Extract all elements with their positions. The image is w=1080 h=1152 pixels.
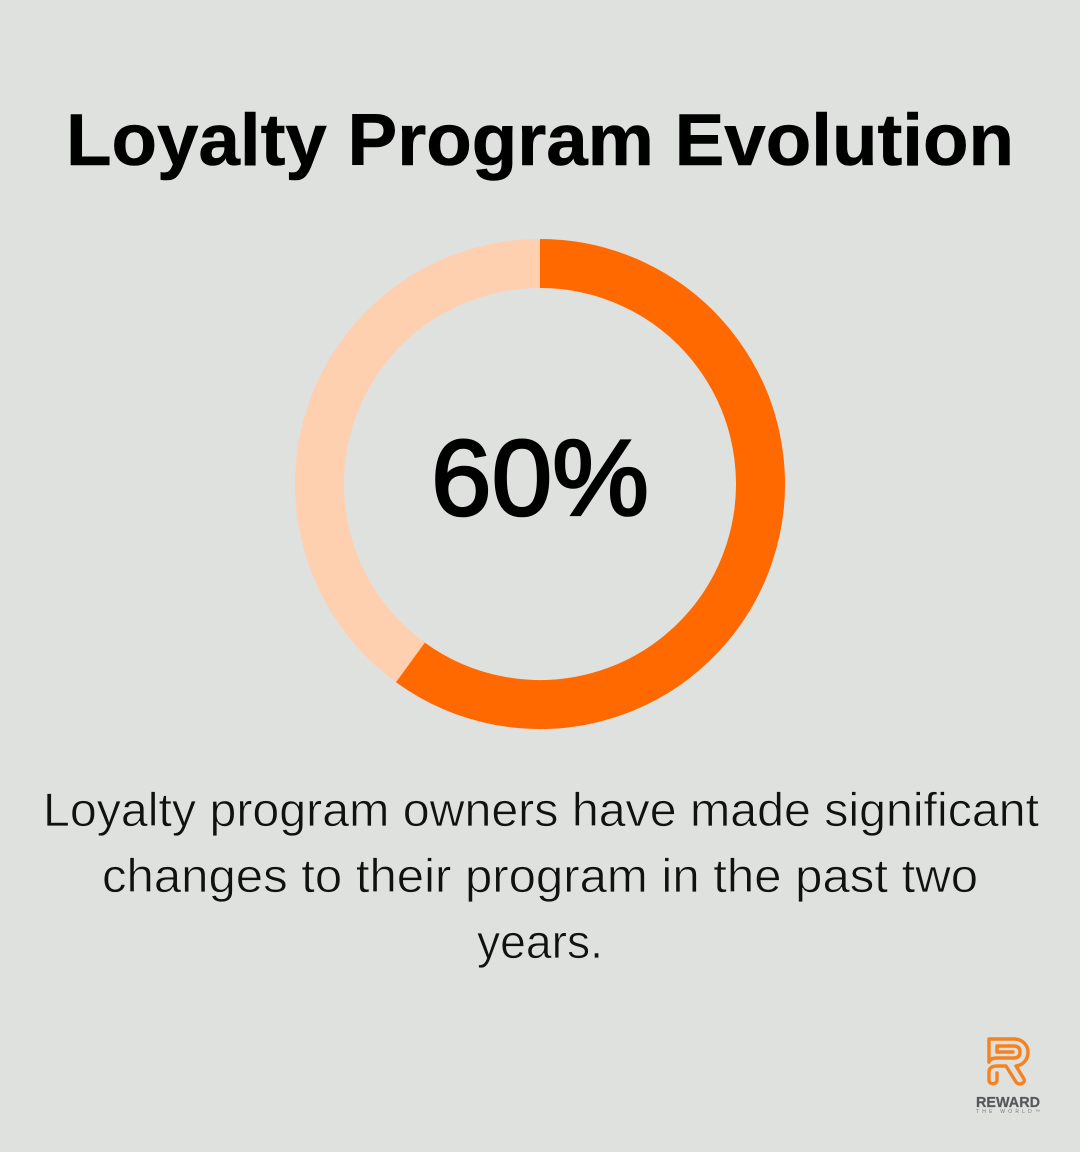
chart track: remaining 40% [319, 263, 540, 662]
title: Loyalty Program Evolution [66, 100, 1014, 181]
logo tagline: THE WORLD™ [976, 1109, 1040, 1115]
icon: R mark [989, 1039, 1028, 1084]
description text: years. [477, 915, 603, 968]
description text [43, 783, 1039, 968]
chart value: 60% [431, 417, 649, 538]
chart segment: 60% [410, 264, 760, 704]
description text: changes to their program in the past two [102, 849, 978, 902]
logo wordmark: REWARD [976, 1095, 1040, 1111]
description text: Loyalty program owners have made significant [43, 783, 1039, 836]
logo: Reward the World [976, 1039, 1040, 1115]
donut chart: 60% [319, 263, 760, 704]
